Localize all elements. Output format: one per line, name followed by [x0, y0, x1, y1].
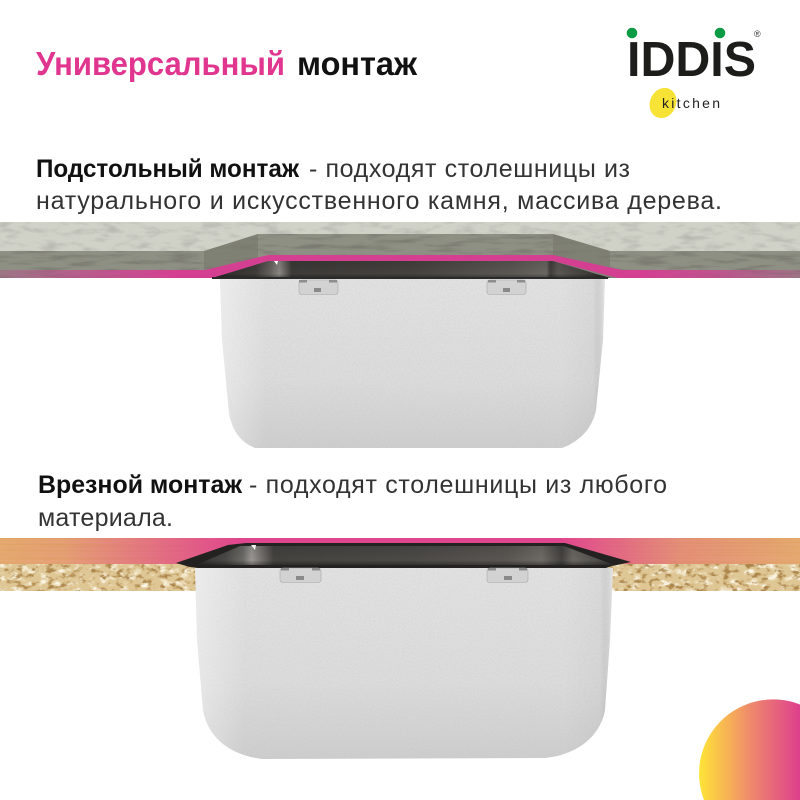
logo: IDDIS kitchen: ®: [754, 29, 761, 39]
wood veneer: [0, 538, 800, 564]
sink bowl interior: [212, 261, 610, 278]
text block: drop-in description: [38, 471, 667, 532]
mounting clip right: [487, 568, 528, 582]
sink 1: undermount: [212, 261, 610, 449]
mounting clip left: [299, 280, 338, 294]
mounting clip right: [487, 280, 526, 294]
decorative gradient circle: [699, 699, 800, 800]
stone front face: [0, 234, 800, 278]
text block: drop-in description: - подходят столешницы из любого: [249, 471, 667, 499]
sink 2: drop-in: [176, 543, 631, 760]
text block: undermount description: [36, 155, 722, 215]
text block: drop-in description: Врезной монтаж: [38, 471, 242, 499]
countertop: stone with pink undermount line: [0, 222, 800, 278]
text block: drop-in description: материала.: [38, 504, 173, 532]
logo: IDDIS kitchen: kitchen: [662, 95, 720, 111]
pink line: [0, 255, 800, 278]
logo: IDDIS kitchen: [627, 28, 761, 123]
chipboard: [0, 564, 800, 591]
text block: undermount description: - подходят столешницы из: [309, 155, 630, 183]
logo: IDDIS kitchen: IDDIS: [627, 33, 756, 87]
sink rim and bowl: [176, 543, 631, 568]
mounting clip left: [280, 568, 321, 582]
title: монтаж: [297, 45, 418, 82]
countertop: wood and chipboard: [0, 538, 800, 591]
sink body: [195, 568, 613, 759]
title: Универсальный: [36, 45, 285, 82]
text block: undermount description: Подстольный монтаж: [36, 155, 299, 183]
sink body: [220, 279, 605, 448]
title: [36, 45, 418, 82]
stone top surface: [0, 222, 800, 252]
text block: undermount description: натурального и искусственного камня, массива дерева.: [36, 187, 722, 215]
